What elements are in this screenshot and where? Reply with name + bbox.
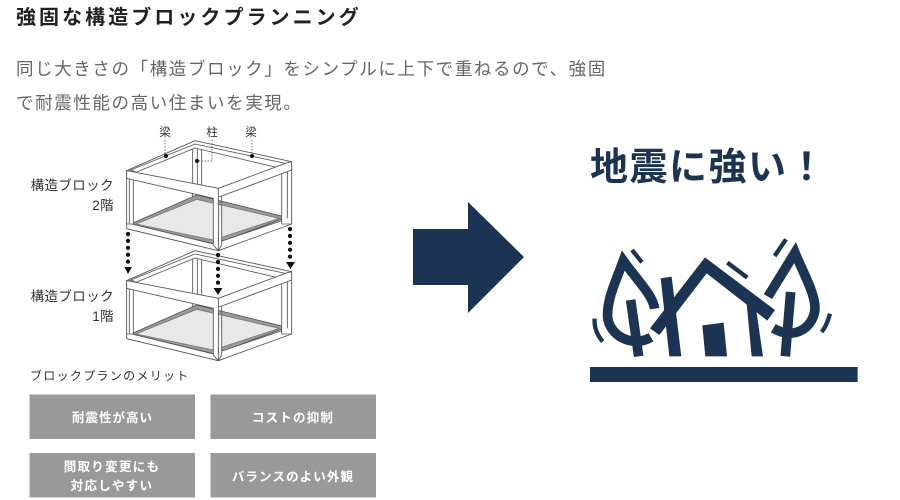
part labels: beams and column: 梁	[159, 125, 171, 139]
merit: adaptable floor plan: 間取り変更にも	[64, 459, 160, 474]
left tree	[608, 261, 655, 356]
merits heading: ブロックプランのメリット	[30, 368, 190, 383]
right tree	[768, 253, 815, 356]
icon: house and trees shaking in earthquake	[590, 239, 858, 382]
block label 1F	[31, 288, 114, 324]
part labels: beams and column	[159, 125, 257, 139]
merit: balanced exterior: バランスのよい外観	[232, 469, 354, 484]
motion lines	[595, 239, 830, 342]
merit: adaptable floor plan	[30, 453, 195, 498]
diagram: stacked structural blocks	[31, 125, 295, 361]
part labels: beams and column: 梁	[245, 125, 257, 139]
house walls	[661, 277, 763, 356]
block label 2F: 構造ブロック	[31, 177, 114, 193]
title: 強固な構造ブロックプランニング	[16, 5, 362, 29]
block label 1F: 1階	[92, 309, 114, 324]
merit: balanced exterior	[210, 453, 376, 498]
leader lines to parts	[165, 140, 252, 161]
arrow	[413, 202, 524, 313]
dotted stacking arrows	[124, 229, 295, 295]
description text: 同じ大きさの「構造ブロック」をシンプルに上下で重ねるので、強固	[16, 59, 607, 79]
merit: high seismic resistance	[30, 394, 195, 439]
block label 2F	[31, 177, 114, 213]
ground	[590, 367, 858, 382]
description text: で耐震性能の高い住まいを実現。	[16, 93, 302, 113]
lower structural block	[127, 251, 292, 361]
merit buttons	[30, 394, 376, 498]
callout heading: 地震に強い！	[590, 147, 827, 189]
house door	[702, 323, 727, 356]
part labels: beams and column: 柱	[206, 125, 218, 139]
merit: adaptable floor plan: 対応しやすい	[71, 478, 153, 493]
merit: cost reduction	[210, 394, 376, 439]
house roof	[650, 257, 775, 335]
merit: high seismic resistance: 耐震性が高い	[72, 410, 153, 425]
merit: cost reduction: コストの抑制	[252, 410, 334, 425]
block label 2F: 2階	[92, 198, 114, 213]
leader dots	[164, 154, 254, 163]
description text	[16, 59, 607, 113]
block label 1F: 構造ブロック	[31, 288, 114, 304]
upper structural block	[127, 141, 292, 251]
